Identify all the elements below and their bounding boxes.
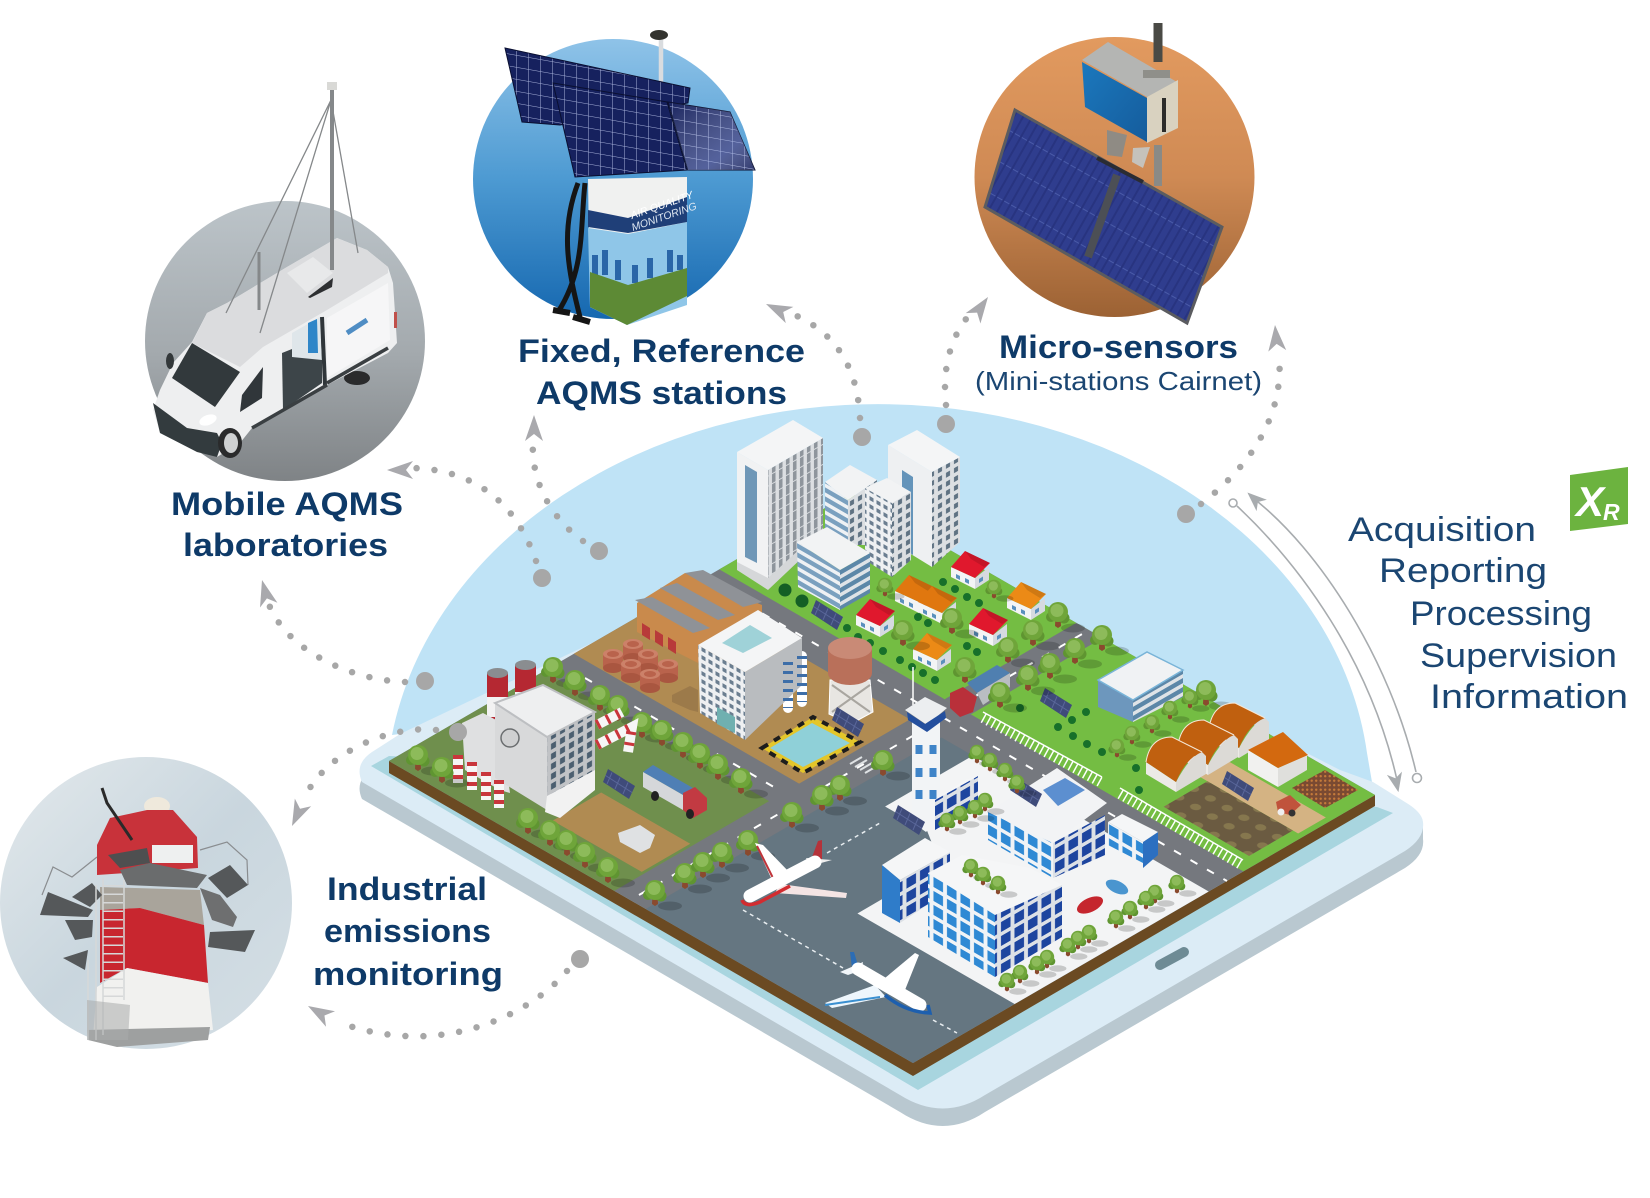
plant solar panel [603,769,635,799]
dotted arrow: to micro-sensors right [1177,324,1286,523]
mirror [166,353,174,369]
terminal back block [988,768,1107,878]
pond solar panel [832,707,864,737]
roof vent [308,278,333,298]
panel centre bar [1088,175,1117,257]
truck on side road [950,665,1010,717]
logo on door [347,320,367,333]
dome: light blue air bubble [392,404,1372,800]
van roof [192,238,388,367]
ladder base lattice [87,1000,130,1040]
road markings [585,585,1227,895]
icon: XR logo [1570,467,1628,531]
icon: XR logo: X [1574,478,1607,525]
runway dashed guides [743,823,957,1033]
grass trees [876,578,1129,696]
dotted arrow: to micro-sensors [937,292,995,433]
start circle bottom [1412,774,1422,782]
photo: mobile laboratory van [145,82,425,481]
brick warehouses [635,570,762,663]
blue airliner [825,952,930,1013]
side slot [1162,98,1166,132]
terminal roof solar panel [1010,777,1042,807]
grey backdrop circle [145,201,425,481]
windscreen [172,343,240,407]
door frame [322,317,325,385]
tower solar panel [893,805,925,835]
grass trees right [1108,680,1233,761]
main block roof [495,685,595,737]
label: data functions list: Information [1430,678,1628,716]
label: micro-sensors: Micro-sensors [999,329,1238,365]
label: micro-sensors [975,329,1262,396]
cabinet [588,177,687,325]
label: fixed reference stations: AQMS stations [536,375,787,411]
icon: XR logo: R [1603,499,1620,525]
main block right face [547,712,595,810]
sensor mast [659,40,663,102]
green print [590,268,687,325]
road trees [541,657,910,832]
tractor [1276,795,1301,816]
red band [100,908,208,983]
skyline print [595,250,680,283]
parked cars [1074,876,1130,917]
upward flow line [1253,498,1416,772]
pipe stripes red [597,712,632,752]
tablet top surface [360,520,1423,1108]
small vegetable field [1292,770,1358,808]
sky print on cabinet [588,222,687,325]
label: data functions list: Supervision [1420,637,1617,675]
dark blue band [588,197,687,233]
mount clamp [1143,70,1170,78]
stand feet [553,310,590,322]
concrete band [100,887,204,925]
black curved stand [558,183,585,317]
rust storage tanks [603,639,678,693]
upper gallery [108,848,150,868]
headlight [198,412,218,428]
soil side of the city block [389,761,1375,1076]
settling pond [762,717,860,773]
tower: back centre [825,465,877,545]
pipes beside building [788,656,802,708]
tablet screen [371,756,1393,1090]
lower pole [1154,145,1162,186]
enclosure blue front [1082,62,1147,142]
white cap [144,797,170,815]
tower: middle [865,478,911,577]
ladder rungs [103,885,123,1000]
entrance annex [545,770,595,818]
bracket left [1107,130,1127,157]
thin data flow arrows [1229,490,1422,791]
treatment plant building [698,610,802,740]
label: data functions list: Acquisition [1348,511,1536,549]
label: mobile laboratories: laboratories [183,527,388,563]
grass office building [1098,652,1183,722]
farm house [1248,732,1308,787]
farm solar panel [1222,771,1254,801]
isometric city [389,420,1375,1076]
arrowhead up [1245,490,1264,508]
antenna [102,788,132,840]
label: mobile laboratories [171,486,403,563]
photo: fixed reference station [473,30,755,325]
terminal front block [928,855,1062,977]
solar panels on grass [811,600,1072,718]
back solar panel [505,48,690,125]
dotted arrow: to mobile laboratories [387,461,551,587]
railings [42,842,248,895]
bracket right [1132,147,1150,168]
label: micro-sensors: (Mini-stations Cairnet) [975,366,1262,396]
bottom row trees [406,745,775,910]
tablet side edge [360,769,1423,1126]
lorry [643,765,707,819]
label: data functions list: Processing [1410,595,1592,633]
label: mobile laboratories: Mobile AQMS [171,486,403,522]
label: fixed reference stations: Fixed, Reference [518,333,805,369]
downward flow line [1237,506,1397,780]
arrowhead down [1389,774,1404,791]
dotted arrow: to fixed stations from right [762,296,871,446]
power plant [458,660,632,818]
van body [153,238,397,457]
rear wheel [344,371,370,385]
delivery van [618,825,655,853]
tall chimneys [487,660,536,738]
start circle top [1229,499,1237,507]
small striped stacks [458,755,499,808]
grey foot ring [87,1027,210,1047]
label: fixed reference stations [518,333,805,411]
water tower [828,637,873,724]
tablet home button [1160,952,1184,965]
striped pipes [597,712,632,752]
tower: tall right [888,430,960,567]
label: industrial emissions monitoring: monitoring [313,956,503,992]
hedge bushes [847,582,1139,790]
upper pole [1154,23,1162,62]
door opening [282,337,322,410]
dotted arrow: to industrial stack lower [304,950,589,1036]
white lower band [93,968,213,1037]
tower annex [922,776,978,830]
sky backdrop circle [0,757,292,1049]
office towers [737,420,960,610]
mast and guy wires [226,90,358,333]
cabinet label line two: MONITORING [630,200,698,234]
ladder [88,878,124,1040]
wooden crates [672,686,698,712]
panel glare [668,102,755,170]
tower: tall left [737,420,823,590]
terminal trees [938,745,1196,995]
office: low front [797,527,870,610]
GPS dome [650,30,668,40]
white fence [983,712,1243,860]
front wheel [218,428,242,458]
left wing [462,713,510,793]
platform ring and grilles [40,863,255,970]
dotted arrow: to industrial stack [284,723,467,830]
houses [856,551,1046,671]
label: industrial emissions monitoring: Industrial [327,871,487,907]
hangars [1146,703,1269,792]
stack stripes [458,755,499,808]
mast head [327,82,337,90]
terminal left block [882,838,950,923]
red airliner [742,840,847,905]
rear door [327,283,390,378]
label: industrial emissions monitoring: emissions [324,913,491,949]
crosswalk [850,757,877,773]
tail light [394,312,397,328]
large bushes [785,590,802,601]
instrument racks [292,317,322,360]
front right solar panel [668,102,755,170]
cab window [240,367,263,412]
enclosure top [1082,42,1177,97]
flat ground plots [389,493,1375,1063]
bumper [153,403,222,457]
panel clamp [1097,158,1143,182]
control tower [905,667,947,832]
sill trim [252,348,388,428]
main block left face [495,703,547,810]
red top dome [97,810,198,875]
orange backdrop circle [974,37,1254,317]
photo: industrial stack [0,757,292,1049]
dotted arrow: to fixed stations from left [525,415,608,560]
front left solar panel [553,83,687,177]
blue instrument modules [308,319,318,353]
tablet device [360,520,1423,1126]
dotted arrow: to mobile laboratories lower [253,578,434,690]
fence pickets [983,718,1243,866]
photo: micro-sensor [974,23,1254,323]
roof unit [287,257,333,293]
solar panel [985,110,1222,323]
enclosure side [1147,80,1178,143]
label: data functions list [1348,511,1628,716]
pipe stripes [788,656,802,708]
cabinet label line one: AIR QUALITY [628,189,696,222]
label: industrial emissions monitoring [313,871,503,992]
blue backdrop circle [473,39,753,319]
terminal right wing [1108,814,1158,868]
label: data functions list: Reporting [1379,552,1547,590]
white equipment [152,845,193,863]
wall clock [501,729,519,747]
